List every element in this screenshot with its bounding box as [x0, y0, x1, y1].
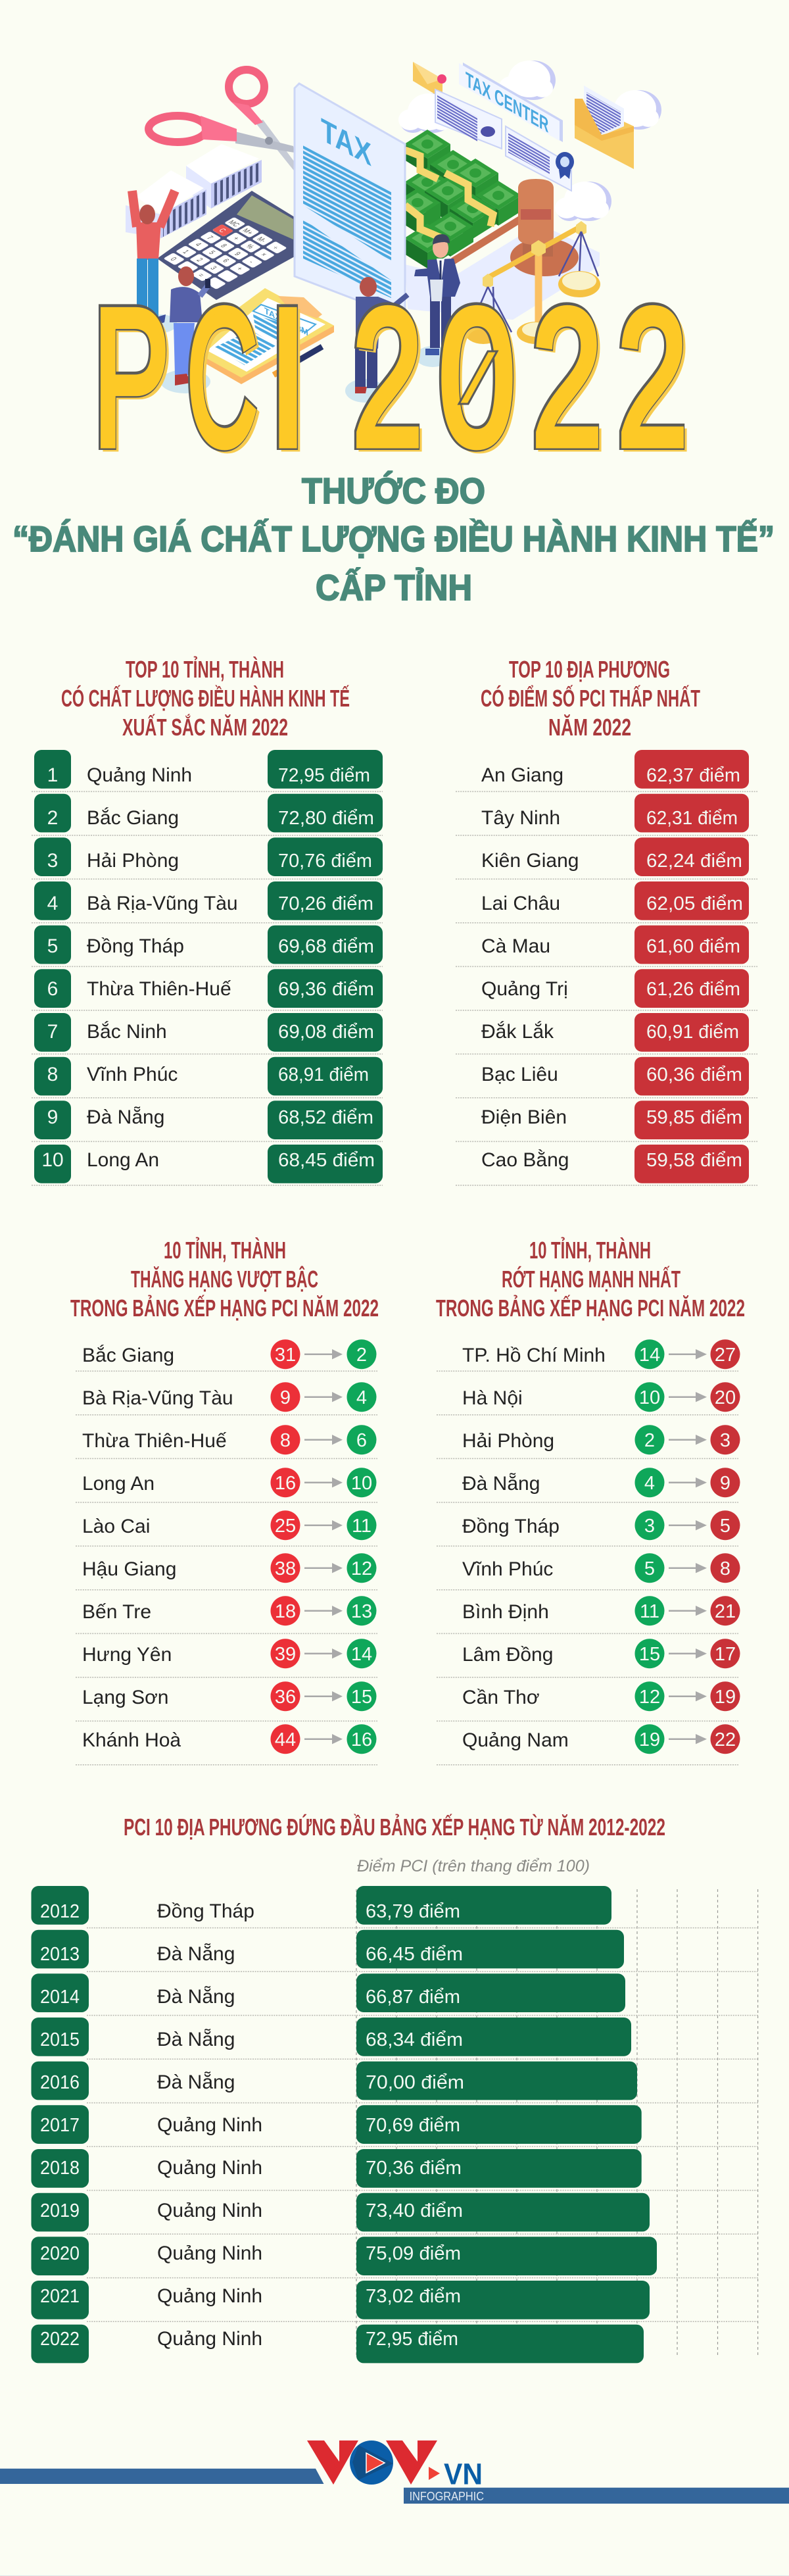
- heading: PCI 2022 big lettering: 0: [439, 268, 515, 486]
- row: Lào Cai 25 to 11: 11: [352, 1516, 371, 1537]
- row: Bà Rịa-Vũng Tàu 9 to 4: 4: [356, 1387, 367, 1408]
- row: Lai Châu: Lai Châu: [481, 893, 560, 914]
- row: 8 Vĩnh Phúc: 8: [47, 1064, 58, 1085]
- row: Hậu Giang 38 to 12: [82, 1553, 376, 1583]
- title: [12, 470, 775, 608]
- document panel with seal: [506, 126, 574, 191]
- row: Bình Định 11 to 21: 11: [640, 1601, 659, 1622]
- row: Điện Biên: [481, 1101, 749, 1139]
- row: Bến Tre 18 to 13: 13: [351, 1601, 372, 1622]
- row: Cao Bằng: [481, 1145, 749, 1183]
- row: Lạng Sơn 36 to 15: Lạng Sơn: [82, 1687, 168, 1708]
- row: 5 Đồng Tháp: 69,68 điểm: [278, 936, 374, 957]
- icon: calculator: =: [195, 272, 206, 278]
- row: 9 Đà Nẵng: [34, 1101, 383, 1139]
- row: Vĩnh Phúc 5 to 8: [462, 1553, 740, 1583]
- row: Bạc Liêu: 60,36 điểm: [646, 1064, 742, 1085]
- bar row: 2020: 75,09 điểm: [366, 2243, 461, 2264]
- row: Kiên Giang: 62,24 điểm: [646, 851, 742, 872]
- row: Bắc Giang 31 to 2: 31: [275, 1345, 296, 1366]
- bar row: 2012: [32, 1886, 611, 1925]
- icon: calculator: MC: [226, 220, 241, 228]
- row: Cao Bằng: 59,58 điểm: [646, 1150, 742, 1171]
- row: Cần Thơ 12 to 19: [462, 1681, 740, 1711]
- heading: falling provinces: RỚT HẠNG MẠNH NHẤT: [502, 1265, 681, 1293]
- bar row: 2016: Đà Nẵng: [157, 2071, 235, 2093]
- heading: PCI 2022 big lettering: 2: [617, 268, 688, 486]
- row: 4 Bà Rịa-Vũng Tàu: 4: [47, 893, 58, 914]
- row: Cần Thơ 12 to 19: 12: [639, 1687, 660, 1708]
- heading: top 10 lowest: NĂM 2022: [548, 714, 631, 741]
- heading: PCI 2022 big lettering: 0: [441, 271, 518, 489]
- row: Đắk Lắk: Đắk Lắk: [481, 1021, 554, 1043]
- bar row: 2020: 2020: [40, 2243, 80, 2264]
- icon: calculator: 8: [218, 243, 228, 249]
- row: 4 Bà Rịa-Vũng Tàu: 70,26 điểm: [278, 893, 373, 914]
- document panel with car: [435, 89, 502, 149]
- heading: top 10 best: CÓ CHẤT LƯỢNG ĐIỀU HÀNH KINH TẾ: [61, 684, 350, 712]
- icon: calculator: 3: [208, 265, 218, 271]
- row: Đà Nẵng 4 to 9: [462, 1468, 740, 1497]
- row: Bình Định 11 to 21: [462, 1596, 740, 1625]
- row: Điện Biên: 59,85 điểm: [646, 1107, 742, 1128]
- row: 2 Bắc Giang: 72,80 điểm: [278, 808, 374, 829]
- heading: PCI 2022 big lettering: 2: [531, 268, 602, 485]
- icon: calculator: 0: [168, 257, 178, 262]
- row: Bến Tre 18 to 13: Bến Tre: [82, 1601, 151, 1623]
- row: 1 Quảng Ninh: 1: [47, 764, 58, 786]
- row: Tây Ninh: Tây Ninh: [481, 807, 560, 829]
- row: 6 Thừa Thiên-Huế: 69,36 điểm: [278, 979, 374, 1000]
- row: Long An 16 to 10: 16: [275, 1473, 296, 1494]
- row: 7 Bắc Ninh: 69,08 điểm: [278, 1022, 374, 1043]
- row: Hậu Giang 38 to 12: Hậu Giang: [82, 1558, 176, 1580]
- icon: calculator: [157, 191, 295, 300]
- row: 8 Vĩnh Phúc: [34, 1057, 383, 1095]
- row: Bà Rịa-Vũng Tàu 9 to 4: [82, 1382, 376, 1412]
- row: 4 Bà Rịa-Vũng Tàu: [34, 881, 383, 920]
- row: 6 Thừa Thiên-Huế: [34, 969, 383, 1008]
- bar row: 2014: 2014: [40, 1987, 80, 2008]
- row: 7 Bắc Ninh: Bắc Ninh: [87, 1021, 167, 1043]
- row: Thừa Thiên-Huế 8 to 6: 8: [280, 1430, 291, 1451]
- icon: calculator: M-: [254, 236, 268, 243]
- row: 3 Hải Phòng: [34, 837, 383, 876]
- row: Lạng Sơn 36 to 15: [82, 1681, 376, 1711]
- row: Lai Châu: [481, 881, 749, 920]
- bar row: 2012: 2012: [40, 1901, 80, 1922]
- icon: calculator: %: [244, 243, 255, 250]
- row: Đắk Lắk: [481, 1013, 749, 1052]
- heading: rising provinces: TRONG BẢNG XẾP HẠNG PCI NĂM 2022: [70, 1295, 379, 1322]
- row: Bạc Liêu: Bạc Liêu: [481, 1064, 558, 1085]
- heading: PCI 2022 big lettering: 2: [352, 268, 423, 486]
- bar row: 2020: [32, 2237, 657, 2275]
- icon: open envelope with paper: [575, 86, 634, 169]
- title: THƯỚC ĐO: [302, 470, 485, 511]
- heading: PCI 2022 big lettering: P: [93, 268, 170, 486]
- bar row: 2012: 63,79 điểm: [366, 1901, 460, 1922]
- row: Hưng Yên 39 to 14: [82, 1639, 376, 1668]
- panel: provinces rising most: [70, 1237, 379, 1765]
- row: 4 Bà Rịa-Vũng Tàu: Bà Rịa-Vũng Tàu: [87, 893, 238, 914]
- bar row: 2015: Đà Nẵng: [157, 2029, 235, 2050]
- bar row: 2019: 2019: [40, 2200, 80, 2221]
- row: Lâm Đồng 15 to 17: 17: [715, 1644, 736, 1665]
- row: Hậu Giang 38 to 12: 38: [275, 1558, 296, 1579]
- bar row: 2018: 70,36 điểm: [366, 2158, 462, 2179]
- row: Cà Mau: 61,60 điểm: [646, 936, 740, 957]
- heading: top 10 lowest: TOP 10 ĐỊA PHƯƠNG: [509, 656, 670, 683]
- row: Quảng Trị: 61,26 điểm: [646, 979, 740, 1000]
- icon: calculator: 5: [206, 250, 216, 256]
- person: businessman in suit with paper: [414, 234, 460, 367]
- icon: receipts blocks: [126, 144, 262, 238]
- bar row: 2022: 72,95 điểm: [366, 2329, 458, 2350]
- icon: calculator: -: [247, 260, 255, 264]
- heading: top 10 best: XUẤT SẮC NĂM 2022: [122, 713, 288, 741]
- row: 7 Bắc Ninh: 7: [47, 1021, 58, 1043]
- row: 1 Quảng Ninh: 72,95 điểm: [278, 765, 370, 786]
- icon: clipboard: [185, 288, 334, 384]
- row: Thừa Thiên-Huế 8 to 6: Thừa Thiên-Huế: [82, 1430, 227, 1452]
- row: Đồng Tháp 3 to 5: 5: [720, 1516, 730, 1537]
- row: 10 Long An: 10: [41, 1149, 64, 1171]
- row: Bến Tre 18 to 13: [82, 1596, 376, 1625]
- icon: calculator: ×: [258, 252, 268, 258]
- logo: VOV.VN infographic: INFOGRAPHIC: [410, 2490, 484, 2503]
- row: Bắc Giang 31 to 2: 2: [356, 1345, 367, 1366]
- row: Lạng Sơn 36 to 15: 36: [275, 1687, 296, 1708]
- icon: calculator: C: [216, 228, 227, 234]
- row: 5 Đồng Tháp: Đồng Tháp: [87, 935, 184, 957]
- heading: PCI 2022 big lettering: C: [189, 271, 260, 489]
- platform under the gavel: [405, 224, 600, 320]
- row: Quảng Trị: [481, 969, 749, 1008]
- logo: VOV.VN infographic: VN: [444, 2458, 483, 2491]
- bar row: 2021: 73,02 điểm: [366, 2286, 461, 2307]
- row: 1 Quảng Ninh: Quảng Ninh: [87, 764, 192, 786]
- person: businessman from behind: [345, 277, 408, 403]
- row: Hưng Yên 39 to 14: Hưng Yên: [82, 1644, 172, 1666]
- bar row: 2016: 70,00 điểm: [366, 2072, 464, 2093]
- row: Long An 16 to 10: 10: [351, 1473, 372, 1494]
- panel: top 10 lowest PCI: [456, 656, 757, 1185]
- bar row: 2016: [32, 2062, 637, 2100]
- row: Hà Nội 10 to 20: 10: [639, 1387, 660, 1408]
- row: 9 Đà Nẵng: 68,52 điểm: [278, 1107, 373, 1128]
- row: Vĩnh Phúc 5 to 8: 8: [720, 1558, 730, 1579]
- bar row: 2022: Quảng Ninh: [157, 2328, 262, 2350]
- row: 3 Hải Phòng: 3: [47, 850, 58, 872]
- row: 6 Thừa Thiên-Huế: Thừa Thiên-Huế: [87, 978, 231, 1000]
- row: Long An 16 to 10: Long An: [82, 1473, 155, 1495]
- heading: PCI 2022 big lettering: 2: [617, 268, 687, 485]
- row: Đà Nẵng 4 to 9: Đà Nẵng: [462, 1473, 540, 1495]
- row: Cao Bằng: Cao Bằng: [481, 1149, 569, 1171]
- row: Lào Cai 25 to 11: [82, 1510, 376, 1540]
- bar row: 2014: Đà Nẵng: [157, 1986, 235, 2008]
- row: Đồng Tháp 3 to 5: 3: [644, 1516, 655, 1537]
- bar row: 2019: [32, 2193, 650, 2231]
- row: Tây Ninh: 62,31 điểm: [646, 808, 738, 829]
- row: 8 Vĩnh Phúc: 68,91 điểm: [278, 1064, 369, 1085]
- icon: pen: [274, 347, 322, 375]
- row: Long An 16 to 10: [82, 1468, 376, 1497]
- icon: calculator: .: [183, 265, 191, 270]
- row: Quảng Nam 19 to 22: Quảng Nam: [462, 1729, 569, 1751]
- panel: PCI leaders 2012-2022: [32, 1813, 758, 2363]
- row: Cần Thơ 12 to 19: 19: [715, 1687, 736, 1708]
- bar row: 2022: [32, 2325, 644, 2363]
- heading: PCI 2022 big lettering: I: [268, 268, 306, 485]
- heading: PCI 2022 big lettering: 2: [355, 271, 425, 489]
- heading: PCI 2022 big lettering: 0: [438, 268, 515, 485]
- heading: PCI 2022 big lettering: I: [269, 268, 307, 486]
- logo: VOV.VN infographic: [0, 2440, 789, 2504]
- row: Vĩnh Phúc 5 to 8: 5: [644, 1558, 655, 1579]
- row: Đắk Lắk: 60,91 điểm: [646, 1022, 739, 1043]
- row: 5 Đồng Tháp: [34, 926, 383, 964]
- row: Bình Định 11 to 21: Bình Định: [462, 1601, 549, 1623]
- bar row: 2017: 2017: [40, 2115, 80, 2136]
- row: An Giang: [481, 750, 749, 789]
- row: 7 Bắc Ninh: [34, 1013, 383, 1052]
- row: Hà Nội 10 to 20: 20: [715, 1387, 736, 1408]
- bar row: 2012: Đồng Tháp: [157, 1900, 254, 1922]
- row: 3 Hải Phòng: Hải Phòng: [87, 850, 179, 872]
- row: Bà Rịa-Vũng Tàu 9 to 4: 9: [280, 1387, 291, 1408]
- row: Đà Nẵng 4 to 9: 4: [644, 1473, 655, 1494]
- row: Bạc Liêu: [481, 1057, 749, 1095]
- bar row: 2019: Quảng Ninh: [157, 2200, 262, 2221]
- row: 9 Đà Nẵng: Đà Nẵng: [87, 1106, 164, 1128]
- row: Lào Cai 25 to 11: 25: [275, 1516, 296, 1537]
- row: Vĩnh Phúc 5 to 8: Vĩnh Phúc: [462, 1558, 553, 1580]
- row: Khánh Hoà 44 to 16: 44: [275, 1729, 296, 1750]
- banner: tax center: TAX CENTER: [466, 67, 548, 137]
- icon: clouds: [398, 61, 661, 221]
- row: Lạng Sơn 36 to 15: 15: [351, 1687, 372, 1708]
- bar row: 2021: 2021: [40, 2286, 80, 2307]
- row: 10 Long An: Long An: [87, 1149, 159, 1171]
- icon: calculator: +: [231, 235, 241, 241]
- heading: rising provinces: THĂNG HẠNG VƯỢT BẬC: [131, 1265, 318, 1293]
- row: Bến Tre 18 to 13: 18: [275, 1601, 296, 1622]
- icon: scissors: [149, 70, 313, 189]
- row: Kiên Giang: [481, 837, 749, 876]
- row: Tây Ninh: [481, 794, 749, 832]
- row: Lâm Đồng 15 to 17: Lâm Đồng: [462, 1644, 553, 1666]
- bar row: 2019: 73,40 điểm: [366, 2200, 463, 2221]
- bar row: 2013: 2013: [40, 1944, 80, 1965]
- row: Hậu Giang 38 to 12: 12: [351, 1558, 372, 1579]
- icon: calculator: +: [234, 266, 244, 272]
- bar row: 2017: [32, 2105, 642, 2144]
- bar row: 2021: Quảng Ninh: [157, 2285, 262, 2307]
- row: TP. Hồ Chí Minh 14 to 27: 14: [639, 1345, 660, 1366]
- heading: falling provinces: 10 TỈNH, THÀNH: [529, 1237, 651, 1264]
- row: TP. Hồ Chí Minh 14 to 27: [462, 1339, 740, 1369]
- bar row: 2021: [32, 2281, 650, 2319]
- row: Hải Phòng 2 to 3: [462, 1425, 740, 1454]
- row: Bà Rịa-Vũng Tàu 9 to 4: Bà Rịa-Vũng Tàu: [82, 1387, 233, 1409]
- person: red shirt with arms raised: [132, 191, 177, 333]
- icon: balance scales: [465, 221, 600, 344]
- icon: calculator: ÷: [270, 245, 280, 251]
- tax document: TAX: [321, 111, 371, 173]
- row: 1 Quảng Ninh: [34, 750, 383, 789]
- row: Lào Cai 25 to 11: Lào Cai: [82, 1516, 150, 1537]
- bar row: 2013: [32, 1930, 624, 1968]
- row: 3 Hải Phòng: 70,76 điểm: [278, 851, 372, 872]
- heading: rising provinces: 10 TỈNH, THÀNH: [164, 1237, 286, 1264]
- row: 10 Long An: [34, 1145, 383, 1183]
- bar row: 2014: 66,87 điểm: [366, 1987, 460, 2008]
- heading: rising provinces: [70, 1237, 379, 1322]
- icon: calculator: 6: [220, 258, 230, 264]
- row: Cần Thơ 12 to 19: Cần Thơ: [462, 1687, 540, 1708]
- heading: PCI 2022 big lettering: P: [93, 268, 169, 485]
- icon: clipboard: TAX FORM: [264, 305, 308, 338]
- bar row: 2014: [32, 1973, 625, 2012]
- row: Bình Định 11 to 21: 21: [715, 1601, 736, 1622]
- heading: PCI 2022 big lettering: P: [96, 271, 172, 489]
- bar row: 2013: Đà Nẵng: [157, 1943, 235, 1965]
- row: 2 Bắc Giang: [34, 794, 383, 832]
- row: An Giang: 62,37 điểm: [646, 765, 740, 786]
- heading: PCI 2022 big lettering: [93, 268, 690, 489]
- bar row: 2013: 66,45 điểm: [366, 1944, 463, 1965]
- row: Hà Nội 10 to 20: Hà Nội: [462, 1387, 523, 1409]
- row: Khánh Hoà 44 to 16: [82, 1724, 376, 1754]
- icon: stacks of money: [394, 130, 521, 268]
- bar row: 2020: Quảng Ninh: [157, 2242, 262, 2264]
- row: Kiên Giang: Kiên Giang: [481, 850, 579, 872]
- row: Hưng Yên 39 to 14: 14: [351, 1644, 372, 1665]
- row: Thừa Thiên-Huế 8 to 6: 6: [356, 1430, 367, 1451]
- row: Quảng Nam 19 to 22: 19: [639, 1729, 660, 1750]
- icon: calculator: 1: [180, 249, 191, 255]
- row: Cà Mau: Cà Mau: [481, 935, 550, 957]
- axis caption: Điểm PCI (trên thang điểm 100): [357, 1857, 590, 1875]
- row: Đà Nẵng 4 to 9: 9: [720, 1473, 730, 1494]
- panel: top 10 best provinces: [32, 656, 383, 1185]
- bar row: 2015: 68,34 điểm: [366, 2029, 463, 2050]
- row: An Giang: An Giang: [481, 764, 563, 786]
- person: phone user in blue jacket: [160, 266, 210, 393]
- row: 2 Bắc Giang: 2: [47, 807, 58, 829]
- row: Quảng Nam 19 to 22: [462, 1724, 740, 1754]
- row: Bắc Giang 31 to 2: Bắc Giang: [82, 1345, 174, 1366]
- row: 5 Đồng Tháp: 5: [47, 935, 58, 957]
- icon: calculator: 7: [204, 235, 214, 241]
- row: Lâm Đồng 15 to 17: 15: [639, 1644, 660, 1665]
- bar row: 2018: Quảng Ninh: [157, 2157, 262, 2179]
- row: Đồng Tháp 3 to 5: Đồng Tháp: [462, 1516, 560, 1537]
- row: Hà Nội 10 to 20: [462, 1382, 740, 1412]
- row: Đồng Tháp 3 to 5: [462, 1510, 740, 1540]
- hero illustration: tax scene: [126, 61, 661, 403]
- icon: envelope with red dot: [413, 62, 446, 99]
- tax document: [295, 84, 405, 318]
- row: Lai Châu: 62,05 điểm: [646, 893, 743, 914]
- row: Cà Mau: [481, 926, 749, 964]
- heading: PCI 2022 big lettering: C: [186, 268, 257, 485]
- row: TP. Hồ Chí Minh 14 to 27: TP. Hồ Chí Minh: [462, 1345, 606, 1366]
- row: Hải Phòng 2 to 3: Hải Phòng: [462, 1430, 554, 1452]
- heading: PCI 2022 big lettering: C: [187, 268, 258, 486]
- row: 10 Long An: 68,45 điểm: [278, 1150, 375, 1171]
- bar row: 2015: [32, 2018, 631, 2056]
- heading: falling provinces: [436, 1237, 745, 1322]
- bar row: 2015: 2015: [40, 2029, 80, 2050]
- row: Khánh Hoà 44 to 16: 16: [351, 1729, 372, 1750]
- icon: gavel: [453, 179, 579, 276]
- heading: PCI 2022 big lettering: I: [272, 271, 310, 489]
- row: 9 Đà Nẵng: 9: [47, 1106, 58, 1128]
- title: CẤP TỈNH: [316, 567, 472, 608]
- icon: calculator: M+: [240, 228, 254, 236]
- heading: PCI 2022 big lettering: 2: [535, 271, 605, 489]
- row: Hải Phòng 2 to 3: 3: [720, 1430, 730, 1451]
- bar row: 2022: 2022: [40, 2329, 80, 2350]
- heading: PCI 2022 big lettering: 2: [620, 271, 690, 489]
- row: Quảng Nam 19 to 22: 22: [715, 1729, 736, 1750]
- row: Hưng Yên 39 to 14: 39: [275, 1644, 296, 1665]
- heading: PCI 2022 big lettering: 2: [532, 268, 602, 486]
- bar row: 2018: 2018: [40, 2158, 80, 2179]
- bar row: 2016: 2016: [40, 2072, 80, 2093]
- row: 6 Thừa Thiên-Huế: 6: [47, 978, 58, 1000]
- row: Lâm Đồng 15 to 17: [462, 1639, 740, 1668]
- icon: calculator: 9: [232, 251, 242, 257]
- row: 8 Vĩnh Phúc: Vĩnh Phúc: [87, 1064, 178, 1085]
- bar row: 2017: Quảng Ninh: [157, 2114, 262, 2136]
- row: TP. Hồ Chí Minh 14 to 27: 27: [715, 1345, 736, 1366]
- bar row: 2017: 70,69 điểm: [366, 2115, 460, 2136]
- bar row: 2018: [32, 2149, 642, 2188]
- row: Điện Biên: Điện Biên: [481, 1106, 567, 1128]
- heading: top 10 lowest: [481, 656, 700, 741]
- heading: top 10 best: TOP 10 TỈNH, THÀNH: [126, 656, 284, 683]
- panel: provinces falling most: [436, 1237, 745, 1765]
- heading: top 10 best: [61, 656, 350, 741]
- row: Bắc Giang 31 to 2: [82, 1339, 376, 1369]
- row: 2 Bắc Giang: Bắc Giang: [87, 807, 179, 829]
- row: Thừa Thiên-Huế 8 to 6: [82, 1425, 376, 1454]
- heading: PCI 2022 big lettering: 2: [352, 268, 422, 485]
- row: Quảng Trị: Quảng Trị: [481, 978, 568, 1000]
- row: Khánh Hoà 44 to 16: Khánh Hoà: [82, 1729, 181, 1751]
- icon: calculator: 4: [193, 242, 203, 248]
- icon: calculator: 2: [194, 257, 204, 263]
- row: Hải Phòng 2 to 3: 2: [644, 1430, 655, 1451]
